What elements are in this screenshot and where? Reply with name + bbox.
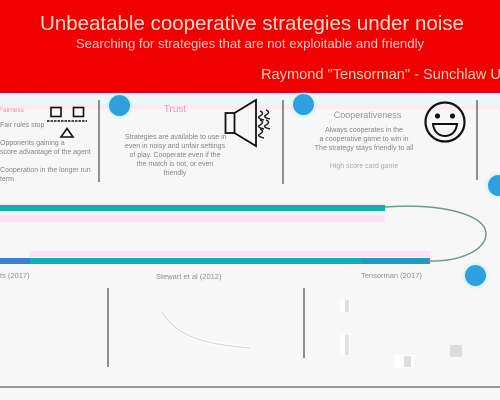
icon: balance scale: [47, 106, 87, 138]
card text: [314, 126, 413, 170]
panel: top left card: [0, 106, 91, 183]
card text: [0, 122, 91, 183]
header banner: [0, 0, 500, 93]
footer rule: [0, 386, 500, 388]
card heading: Cooperativeness: [334, 110, 401, 120]
step marker 4: [465, 265, 486, 286]
chart label: Stewart et al (2012): [156, 272, 221, 281]
card text: Strategies are available to use in: [125, 134, 227, 141]
card text: even in noisy and unfair settings: [125, 143, 225, 150]
card text: Cooperation in the longer run: [0, 167, 91, 174]
title: Unbeatable cooperative strategies under noise: [40, 12, 464, 35]
card text: Always cooperates in the: [325, 127, 403, 134]
divider: top third: [476, 100, 478, 180]
card text: friendly: [164, 170, 186, 177]
chart label: ts (2017): [0, 271, 30, 280]
card heading: Trust: [164, 104, 186, 115]
card text: Fair rules stop: [0, 122, 44, 129]
card text: of play. Cooperate even if the: [130, 152, 220, 159]
card text: term: [0, 176, 14, 183]
timeline track: [0, 203, 487, 264]
chart label: Tensorman (2017): [361, 271, 422, 280]
subtitle: Searching for strategies that are not exploitable and friendly: [76, 36, 424, 51]
card text: [125, 134, 227, 177]
top tint bands: [0, 93, 500, 98]
chart points: [345, 300, 462, 367]
card text: The strategy stays friendly to all: [315, 145, 413, 152]
divider: bottom first: [107, 288, 108, 367]
card text: a cooperative game to win in: [319, 136, 409, 143]
icon: smiling face: [424, 101, 466, 143]
card text: the match is not, or even: [137, 161, 213, 168]
step marker 3: [488, 175, 500, 196]
divider: top second: [282, 100, 284, 184]
icon: speaker with noise: [224, 98, 270, 148]
card text: score advantage of the agent: [0, 149, 91, 156]
step marker 1: [109, 95, 130, 116]
panel: noise card: [125, 104, 227, 177]
card text: High score card game: [330, 163, 398, 170]
panel: bottom middle chart: [156, 272, 250, 348]
divider: bottom second: [303, 288, 304, 358]
divider: top first: [98, 100, 100, 182]
panel: friendly card: [314, 110, 413, 170]
panel: bottom right chart: [345, 271, 462, 367]
step marker 2: [293, 94, 314, 115]
authors: Raymond "Tensorman" - Sunchlaw U: [261, 67, 500, 83]
chart curve: [162, 312, 250, 348]
card text: Opponents gaining a: [0, 140, 65, 147]
